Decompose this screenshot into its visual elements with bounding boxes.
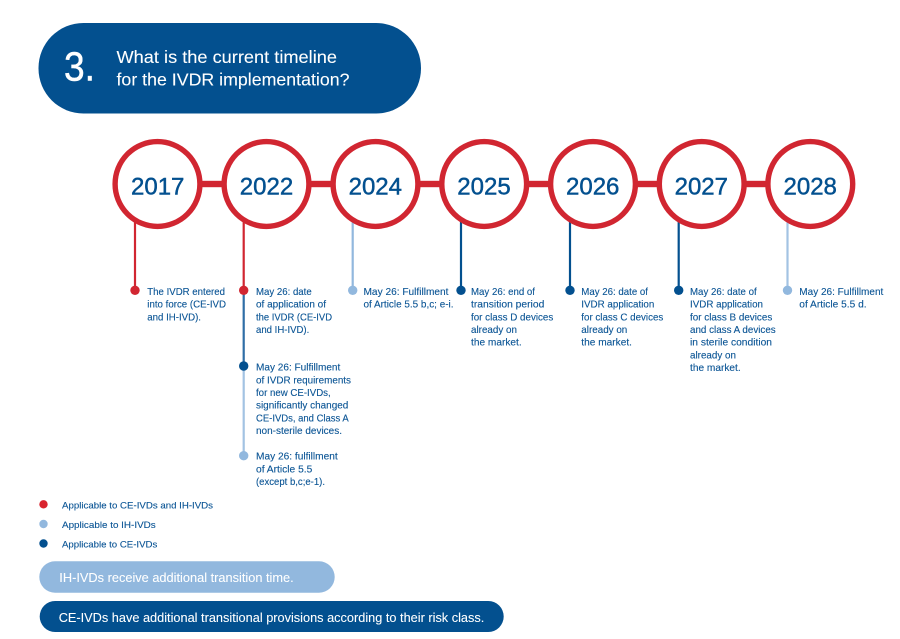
entry 2028 [783,286,883,311]
entry 2027: May 26: date of [690,287,757,298]
entry 2026: the market. [581,338,632,349]
year circle 2022: 2022 [240,173,293,200]
entry 2025: already on [471,325,517,336]
entry 2022 new CE-IVDs: of IVDR requirements [256,375,351,386]
title banner [38,23,421,114]
entry 2022 date of application: of application of [256,300,326,311]
entry 2025: transition period [471,300,545,311]
entry 2026 [565,286,663,349]
entry 2022 new CE-IVDs [239,361,351,437]
entry 2027: already on [690,350,736,361]
entry 2022 date of application [239,286,332,336]
entry 2027: the market. [690,363,741,374]
year circle 2026 [551,142,635,226]
callout: IH-IVDs [39,561,335,593]
year circle 2024 [333,142,418,226]
entry 2027: for class B devices [690,312,772,323]
entry 2022 Article 5.5: (except b,c;e-1). [256,477,325,488]
entry 2022 new CE-IVDs: for new CE-IVDs, [256,388,331,399]
title banner: for the IVDR implementation? [116,69,350,89]
entry 2024: of Article 5.5 b,c; e-i. [364,300,454,311]
entry 2025 [456,286,553,349]
entry 2026: IVDR application [581,300,654,311]
callout: CE-IVDs: CE-IVDs have additional transitional provisions according to their risk class. [59,610,484,625]
entry 2027: IVDR application [690,300,763,311]
year circle 2028 [768,142,853,226]
callout: IH-IVDs: IH-IVDs receive additional transition time. [59,570,294,585]
year circle 2027: 2027 [675,173,728,200]
entry 2027 [674,286,776,374]
entry 2024: May 26: Fulfillment [364,287,449,298]
entry 2022 Article 5.5: of Article 5.5 [256,464,313,475]
entry 2022 Article 5.5 [239,451,338,488]
legend item: both: Applicable to CE-IVDs and IH-IVDs [62,500,213,511]
title banner: 3. [64,44,95,90]
title banner: What is the current timeline [116,47,337,67]
legend item: CE-IVDs: Applicable to CE-IVDs [62,540,157,551]
entry 2022 new CE-IVDs: significantly changed [256,401,349,412]
entry 2027: and class A devices [690,325,776,336]
year circle 2028: 2028 [784,173,837,200]
timeline connector bar [157,181,810,187]
entry 2025: for class D devices [471,312,553,323]
callout: CE-IVDs [40,601,504,632]
legend item: IH-IVDs: Applicable to IH-IVDs [62,520,156,531]
entry 2026: already on [581,325,628,336]
entry 2017 [130,286,226,323]
entry 2026: May 26: date of [581,287,648,298]
entry 2028: May 26: Fulfillment [799,287,883,298]
entry 2022 date of application: the IVDR (CE-IVD [256,312,332,323]
year circle 2022 [224,142,309,226]
entry 2028: of Article 5.5 d. [799,300,867,311]
year circle 2027 [659,142,744,226]
year circle 2017: 2017 [131,173,184,200]
entry 2022 Article 5.5: May 26: fulfillment [256,452,338,463]
year circle 2017 [115,142,200,226]
legend [39,500,213,551]
entry 2017: and IH-IVD). [147,312,201,323]
year circle 2025 [442,142,527,226]
entry 2025: the market. [471,338,522,349]
entry 2022 date of application: May 26: date [256,287,312,298]
timeline stems [134,218,789,456]
entry 2027: in sterile condition [690,338,772,349]
entry 2026: for class C devices [581,312,663,323]
year circle 2026: 2026 [566,173,619,200]
entry 2022 new CE-IVDs: May 26: Fulfillment [256,363,340,374]
entry 2022 new CE-IVDs: CE-IVDs, and Class A [256,413,349,424]
year circle 2025: 2025 [457,173,511,200]
entry 2024 [348,286,454,311]
entry 2022 new CE-IVDs: non-sterile devices. [256,426,342,437]
entry 2022 date of application: and IH-IVD). [256,325,309,336]
entry 2017: The IVDR entered [147,287,225,298]
entry 2017: into force (CE-IVD [147,300,226,311]
entry 2025: May 26: end of [471,287,535,298]
year circle 2024: 2024 [349,173,402,200]
